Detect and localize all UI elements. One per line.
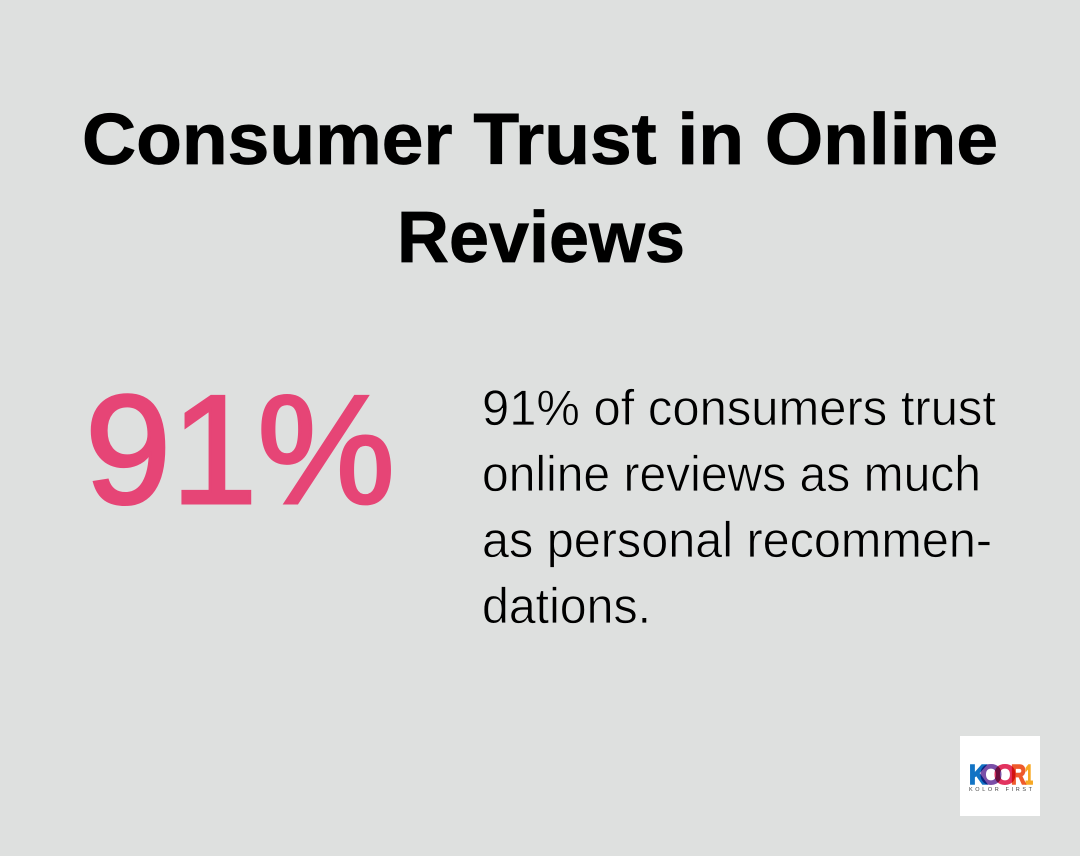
description text: 91% of consumers trust — [482, 380, 996, 436]
logo: Koor1 Kolor First: KOLOR FIRST — [969, 787, 1033, 793]
description text: as personal recommen- — [482, 512, 992, 568]
logo: Koor1 Kolor First: O — [980, 759, 1002, 790]
description text: dations. — [482, 578, 651, 634]
logo: Koor1 Kolor First: O — [994, 759, 1016, 790]
logo: Koor1 Kolor First: R — [1011, 759, 1026, 790]
logo: Koor1 Kolor First: 1 — [1025, 759, 1033, 790]
big statistic: 91%: 91% — [85, 363, 395, 536]
title: Reviews — [397, 198, 685, 278]
logo: Koor1 Kolor First — [960, 736, 1040, 816]
title — [82, 100, 998, 278]
logo: Koor1 Kolor First: K — [969, 759, 987, 790]
description text — [482, 380, 996, 634]
description text: online reviews as much — [482, 446, 981, 502]
title: Consumer Trust in Online — [82, 100, 998, 180]
